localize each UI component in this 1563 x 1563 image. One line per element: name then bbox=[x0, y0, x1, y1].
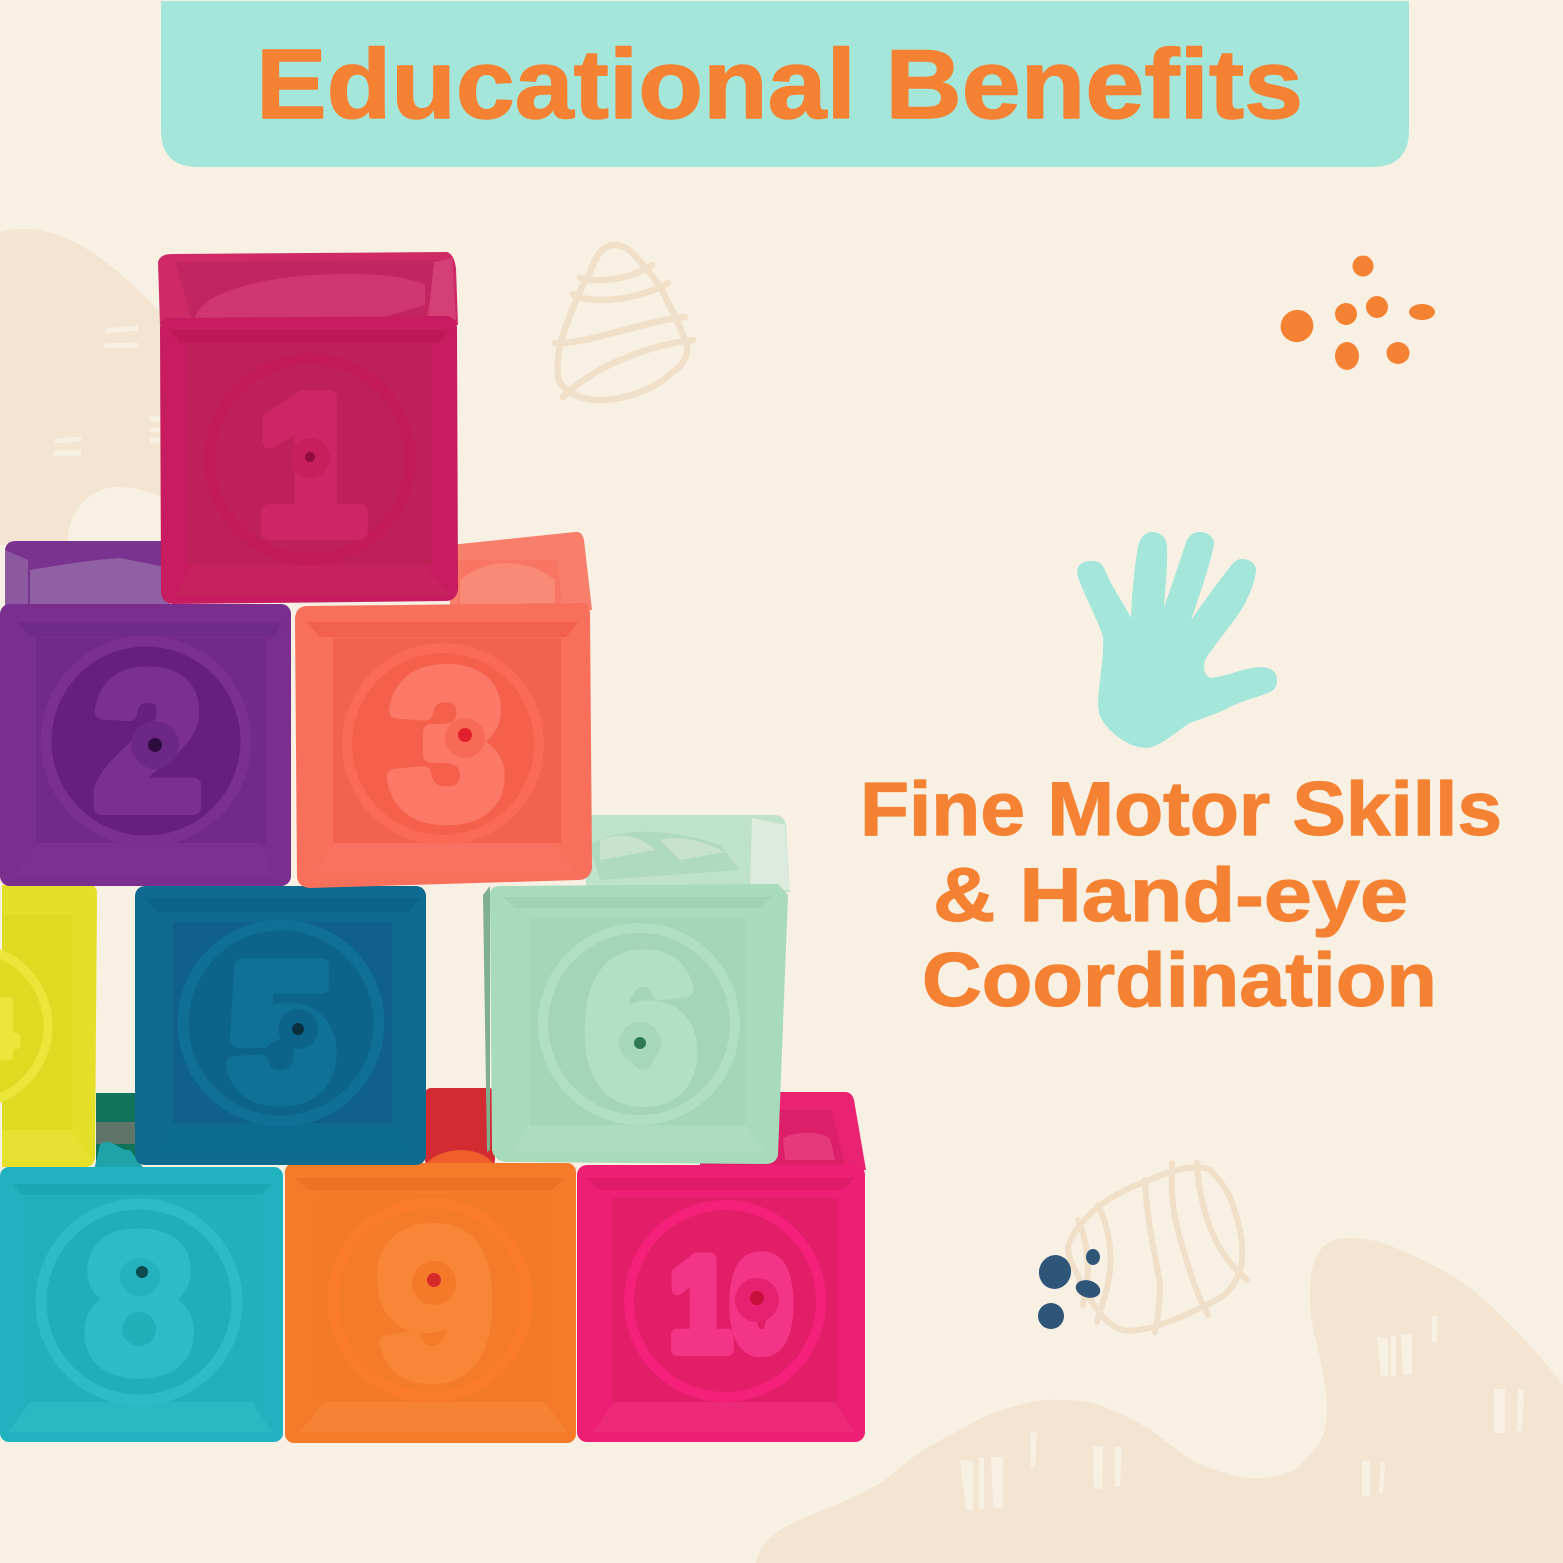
number 5: 5 bbox=[228, 926, 334, 1138]
background hill: left bbox=[0, 229, 170, 545]
block 5 bbox=[135, 886, 426, 1165]
block 10 bbox=[577, 1092, 866, 1442]
block 7 (hidden behind) bbox=[94, 1093, 145, 1170]
title banner bbox=[161, 1, 1409, 167]
skills text: Fine Motor Skills bbox=[860, 767, 1502, 852]
icon: navy dots bbox=[1035, 1249, 1102, 1329]
block 2 bbox=[0, 541, 291, 886]
block 8 bbox=[0, 1167, 283, 1442]
icon: orange dots bbox=[1275, 256, 1435, 370]
icon: mint hand print bbox=[1077, 532, 1277, 748]
number 2: 2 bbox=[95, 636, 201, 848]
background hill: bottom right bbox=[756, 1238, 1563, 1563]
number 8: 8 bbox=[86, 1198, 192, 1410]
title: Educational Benefits bbox=[256, 29, 1303, 139]
skills text bbox=[860, 767, 1502, 1023]
icon: outlined barrel doodle bbox=[1068, 1163, 1247, 1332]
block 1 bbox=[158, 252, 458, 604]
number 1: 1 bbox=[257, 356, 365, 574]
block 4 (yellow, cropped) bbox=[0, 885, 97, 1167]
number 6: 6 bbox=[585, 917, 697, 1140]
block 3 bbox=[295, 532, 592, 888]
skills text: & Hand-eye bbox=[933, 853, 1408, 938]
block behind 9 (red top) bbox=[425, 1088, 495, 1166]
number 10: 10 bbox=[670, 1231, 792, 1377]
block 6 bbox=[483, 815, 790, 1164]
number 9: 9 bbox=[378, 1189, 492, 1418]
skills text: Coordination bbox=[922, 938, 1437, 1023]
number 3: 3 bbox=[390, 630, 504, 859]
block 9 bbox=[285, 1163, 576, 1443]
icon: outlined egg doodle bbox=[555, 245, 693, 400]
